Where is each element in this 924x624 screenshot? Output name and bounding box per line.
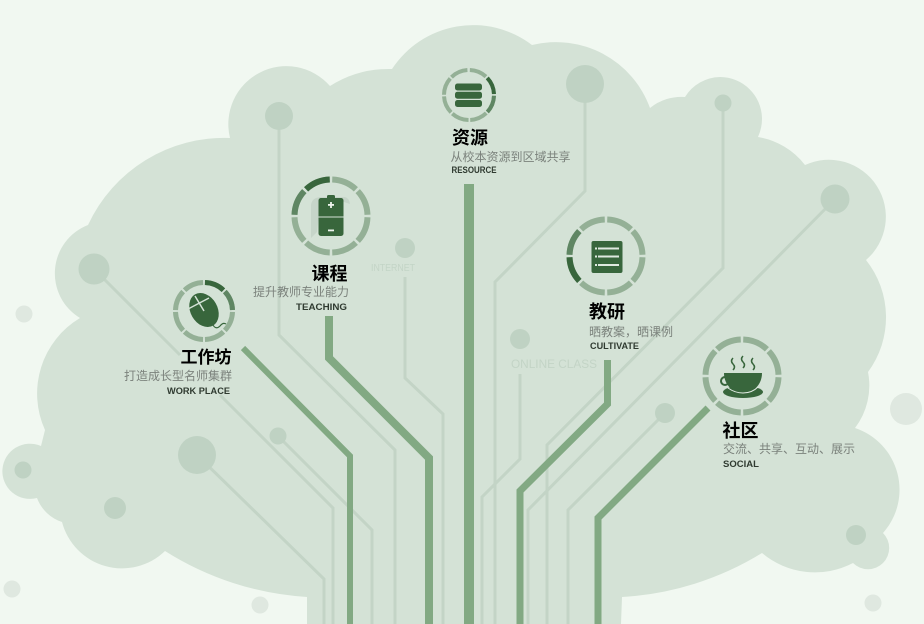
heading: social: 社区 — [722, 420, 758, 441]
floating dots outside the tree — [4, 306, 922, 614]
ring: resource — [434, 60, 504, 130]
thick branch: cultivate — [520, 360, 608, 624]
icon: database stack — [455, 84, 482, 107]
heading: teaching: 课程 — [312, 264, 348, 284]
label: INTERNET: INTERNET — [371, 263, 415, 274]
english: cultivate: CULTIVATE — [590, 341, 639, 351]
ring: teaching — [279, 164, 383, 268]
icon: battery — [311, 195, 350, 238]
description: teaching: 提升教师专业能力 — [253, 284, 349, 299]
description: cultivate: 晒教案，晒课例 — [589, 324, 673, 339]
node: teaching — [253, 164, 383, 312]
node: resource — [434, 60, 571, 175]
thin circuit lines — [94, 84, 835, 624]
circuit node dots — [14, 65, 866, 545]
heading: work place: 工作坊 — [180, 347, 232, 367]
thick branch: resource — [464, 184, 474, 624]
ring: work place — [164, 271, 244, 351]
node: cultivate — [554, 204, 673, 351]
thick branch: teaching — [329, 316, 429, 624]
english: social: SOCIAL — [723, 459, 760, 469]
ring: social — [706, 340, 778, 412]
english: resource: RESOURCE — [452, 165, 496, 175]
english: teaching: TEACHING — [296, 302, 347, 312]
description: work place: 打造成长型名师集群 — [124, 368, 232, 383]
english: work place: WORK PLACE — [167, 386, 230, 396]
label: ONLINE CLASS: ONLINE CLASS — [511, 357, 597, 371]
ring: cultivate — [554, 204, 658, 308]
icon: list — [592, 241, 622, 273]
node: social — [706, 340, 855, 469]
description: social: 交流、共享、互动、展示 — [723, 441, 855, 456]
icon: computer mouse — [183, 288, 226, 332]
heading: resource: 资源 — [452, 128, 488, 148]
heading: cultivate: 教研 — [589, 302, 625, 322]
node: work place — [124, 271, 244, 396]
thick branch: work place — [243, 348, 350, 624]
thick branch: social — [598, 408, 708, 624]
description: resource: 从校本资源到区域共享 — [450, 149, 571, 164]
icon: coffee cup — [721, 356, 763, 398]
